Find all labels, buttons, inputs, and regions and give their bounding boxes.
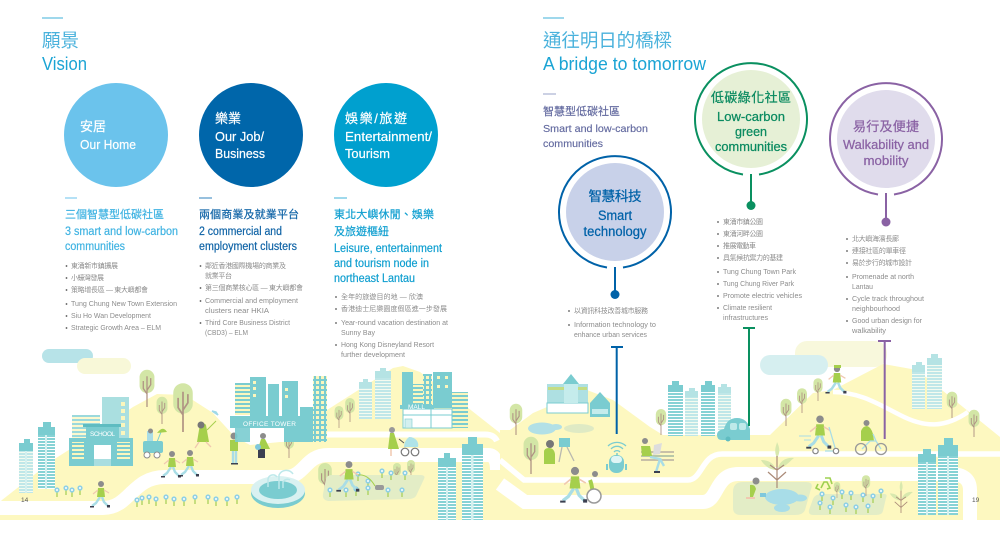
circle: Walkability and mobility: 易行及便捷: [853, 119, 919, 134]
towers: left foreground: [438, 437, 483, 520]
roads: [500, 392, 1000, 520]
person: man standing: [230, 432, 238, 464]
person: painter at easel: [544, 438, 574, 464]
list: low-carbon green communities: Climate resilient: [723, 305, 772, 312]
bullet list: 策略增長區 — 東大嶼都會: [71, 285, 148, 294]
hillside ground: [0, 366, 500, 520]
bullet list: 全年的旅遊目的地 — 欣澳: [341, 292, 423, 301]
circle: Entertainment / Tourism: [334, 83, 438, 187]
bullet list: Commercial and employment: [205, 298, 298, 305]
circle: Low-carbon green communities: green: [735, 124, 767, 139]
school building: SCHOOL: [90, 431, 115, 438]
bullet list: [335, 292, 448, 359]
light towers: right hill: [912, 354, 942, 409]
list: low-carbon green communities: 東涌市鎮公園: [723, 217, 763, 226]
list: smart technology: enhance urban services: [574, 332, 647, 339]
bullet list: Third Core Business District: [205, 320, 290, 327]
right page heading: A bridge to tomorrow: [543, 18, 707, 74]
column heading: employment clusters: [199, 241, 297, 253]
person: pushing wheelchair: [560, 467, 601, 503]
page number 14: 14: [21, 497, 29, 504]
ice cream cart: [143, 428, 167, 458]
circle: Our Home: 安居: [80, 119, 106, 134]
person: gardener watering: [746, 478, 766, 498]
person: reader running: [90, 481, 110, 508]
bullet list: Sunny Bay: [341, 330, 375, 337]
person: girl with kite: [195, 411, 218, 448]
bullet list: 東涌新市鎮擴展: [71, 261, 118, 270]
pond and meadow: [528, 422, 594, 434]
circle: Smart technology: 智慧科技: [588, 189, 642, 204]
person: woman with stroller: [388, 427, 419, 456]
bullet list: Year-round vacation destination at: [341, 320, 448, 327]
column heading: 及旅遊樞紐: [334, 224, 389, 238]
list: walkability and mobility: 北大嶼海濱長廊: [852, 234, 899, 243]
column heading: [334, 207, 443, 285]
list: low-carbon green communities: [717, 217, 803, 322]
list: smart technology: [568, 306, 656, 339]
circle: Our Job / Business: Our Job/: [215, 129, 264, 144]
towers: central group: [668, 381, 731, 436]
list: low-carbon green communities: 具氣候抗禦力的基建: [723, 253, 783, 262]
subheading: smart and low-carbon communities: [543, 94, 648, 150]
person: woman with basket: [255, 433, 270, 458]
circle: Low-carbon green communities: 低碳綠化社區: [711, 90, 791, 105]
circle: Entertainment / Tourism: 娛樂/旅遊: [345, 111, 407, 126]
tower: left pair: [19, 422, 55, 493]
light towers: [359, 368, 391, 419]
hillside ground: [500, 364, 1000, 520]
column heading: northeast Lantau: [334, 273, 415, 285]
fountain: [251, 470, 305, 508]
electric car: [717, 418, 750, 442]
heritage buildings: [547, 374, 610, 417]
towers: right foreground: [918, 438, 958, 515]
left page heading: Vision: [42, 18, 87, 74]
heading English: Vision: [42, 54, 87, 74]
column heading: [65, 207, 178, 253]
column heading: communities: [65, 241, 125, 253]
bullet list: 香港迪士尼樂園度假區進一步發展: [341, 304, 447, 313]
page number 19: 19: [972, 497, 980, 504]
pole: low-carbon green: [743, 328, 755, 426]
subheading: smart and low-carbon communities: Smart and low-carbon: [543, 123, 648, 135]
cloud: left teal: [42, 349, 93, 363]
bullet list: Tung Chung New Town Extension: [71, 301, 177, 308]
list: low-carbon green communities: infrastructures: [723, 315, 768, 322]
bullet list: [66, 261, 177, 332]
office tower: OFFICE TOWER: [243, 421, 296, 428]
list: low-carbon green communities: 東涌河畔公園: [723, 229, 763, 238]
column: leisure, entertainment and tourism: [334, 198, 448, 359]
list: walkability and mobility: 易於步行的城市設計: [852, 258, 912, 267]
person: on scooter: [799, 416, 839, 454]
circle: Smart technology: technology: [584, 224, 647, 239]
list: low-carbon green communities: 推展電動車: [723, 241, 756, 250]
bullet list: 第三個商業核心區 — 東大嶼都會: [205, 283, 303, 292]
column heading: 三個智慧型低碳社區: [65, 207, 164, 221]
person: dog walker: [336, 461, 384, 492]
bullet list: further development: [341, 352, 405, 359]
bullet list: [200, 261, 303, 337]
heading Chinese: 願景: [42, 30, 79, 51]
garden patches with pond, recycling and plants: [733, 442, 913, 515]
park patch with flowers: [323, 468, 424, 501]
mall: MALL: [408, 404, 425, 411]
list: walkability and mobility: Promenade at north: [852, 274, 914, 281]
person: reading on bench: [641, 438, 674, 473]
circle: Low-carbon green communities: Low-carbon: [717, 109, 785, 124]
wifi robot: [606, 442, 627, 473]
circle: Walkability and mobility: mobility: [864, 153, 909, 168]
bullet list: 小蠔灣發展: [71, 273, 104, 282]
circle: Walkability and mobility: [830, 83, 942, 227]
list: walkability and mobility: Good urban design for: [852, 318, 923, 325]
column heading: 2 commercial and: [199, 226, 282, 238]
cloud: right yellow: [795, 341, 887, 367]
column heading: 兩個商業及就業平台: [199, 207, 299, 221]
circle: Low-carbon green communities: [695, 63, 807, 210]
flowers: left lower verge: [54, 485, 240, 507]
office tower: [230, 376, 327, 442]
illustrated landscape: left page: [0, 349, 500, 520]
circle: Our Job / Business: 樂業: [215, 111, 241, 126]
list: walkability and mobility: [846, 234, 924, 335]
bullet list: (CBD3) – ELM: [205, 330, 248, 337]
circle: Our Job / Business: [199, 83, 303, 187]
bullet list: Strategic Growth Area – ELM: [71, 325, 161, 332]
cloud: left yellow: [77, 358, 131, 374]
circle: Our Home: [64, 83, 168, 187]
list: low-carbon green communities: Promote electric vehicles: [723, 293, 803, 300]
school building: [69, 397, 133, 466]
bullet list: Siu Ho Wan Development: [71, 313, 151, 320]
column heading: and tourism node in: [334, 258, 429, 270]
list: smart technology: 以資訊科技改善城市服務: [574, 306, 648, 315]
bullet list: 就業平台: [205, 271, 232, 280]
cloud: right teal: [760, 355, 828, 375]
circle: Entertainment / Tourism: Tourism: [345, 146, 390, 161]
column heading: [199, 207, 299, 253]
column: smart low-carbon communities: [65, 198, 178, 332]
column heading: 3 smart and low-carbon: [65, 226, 178, 238]
circle: Our Job / Business: Business: [215, 146, 265, 161]
circle: Our Home: Our Home: [80, 137, 136, 152]
circle: Low-carbon green communities: communities: [715, 139, 787, 154]
list: walkability and mobility: Cycle track throughout: [852, 296, 924, 303]
heading Chinese: 通往明日的橋樑: [543, 30, 672, 51]
list: smart technology: Information technology to: [574, 322, 656, 329]
bullet list: clusters near HKIA: [205, 308, 269, 315]
trees: right side: [510, 378, 979, 474]
circle: Entertainment / Tourism: Entertainment/: [345, 129, 432, 144]
list: walkability and mobility: 連接社區的單車徑: [852, 246, 906, 255]
column heading: 東北大嶼休閒、娛樂: [334, 207, 434, 221]
pole: smart technology: [611, 347, 623, 434]
list: walkability and mobility: Lantau: [852, 284, 873, 291]
circle: Walkability and mobility: Walkability and: [843, 137, 929, 152]
bullet list: 鄰近香港國際機場的商業及: [205, 261, 286, 270]
list: low-carbon green communities: Tung Chung River Park: [723, 281, 794, 288]
person: cyclist: [856, 420, 886, 454]
circle: Smart technology: [559, 156, 671, 299]
circle: Smart technology: Smart: [598, 208, 632, 223]
person: two runners: [161, 450, 199, 478]
person: hiker: [825, 365, 846, 394]
list: walkability and mobility: neighbourhood: [852, 306, 900, 313]
illustrated landscape: right page: [500, 341, 1000, 520]
column: commercial and employment clusters: [199, 198, 303, 337]
heading English: A bridge to tomorrow: [543, 54, 707, 74]
subheading: smart and low-carbon communities: communities: [543, 138, 603, 150]
mall: [400, 372, 468, 428]
list: low-carbon green communities: Tung Chung Town Park: [723, 269, 797, 276]
trees: left hill: [140, 370, 415, 497]
subheading: smart and low-carbon communities: 智慧型低碳社區: [543, 104, 620, 118]
list: walkability and mobility: walkability: [851, 328, 887, 335]
column heading: Leisure, entertainment: [334, 243, 443, 255]
bullet list: Hong Kong Disneyland Resort: [341, 342, 434, 349]
roads: [0, 434, 497, 508]
pole: walkability: [878, 341, 891, 439]
